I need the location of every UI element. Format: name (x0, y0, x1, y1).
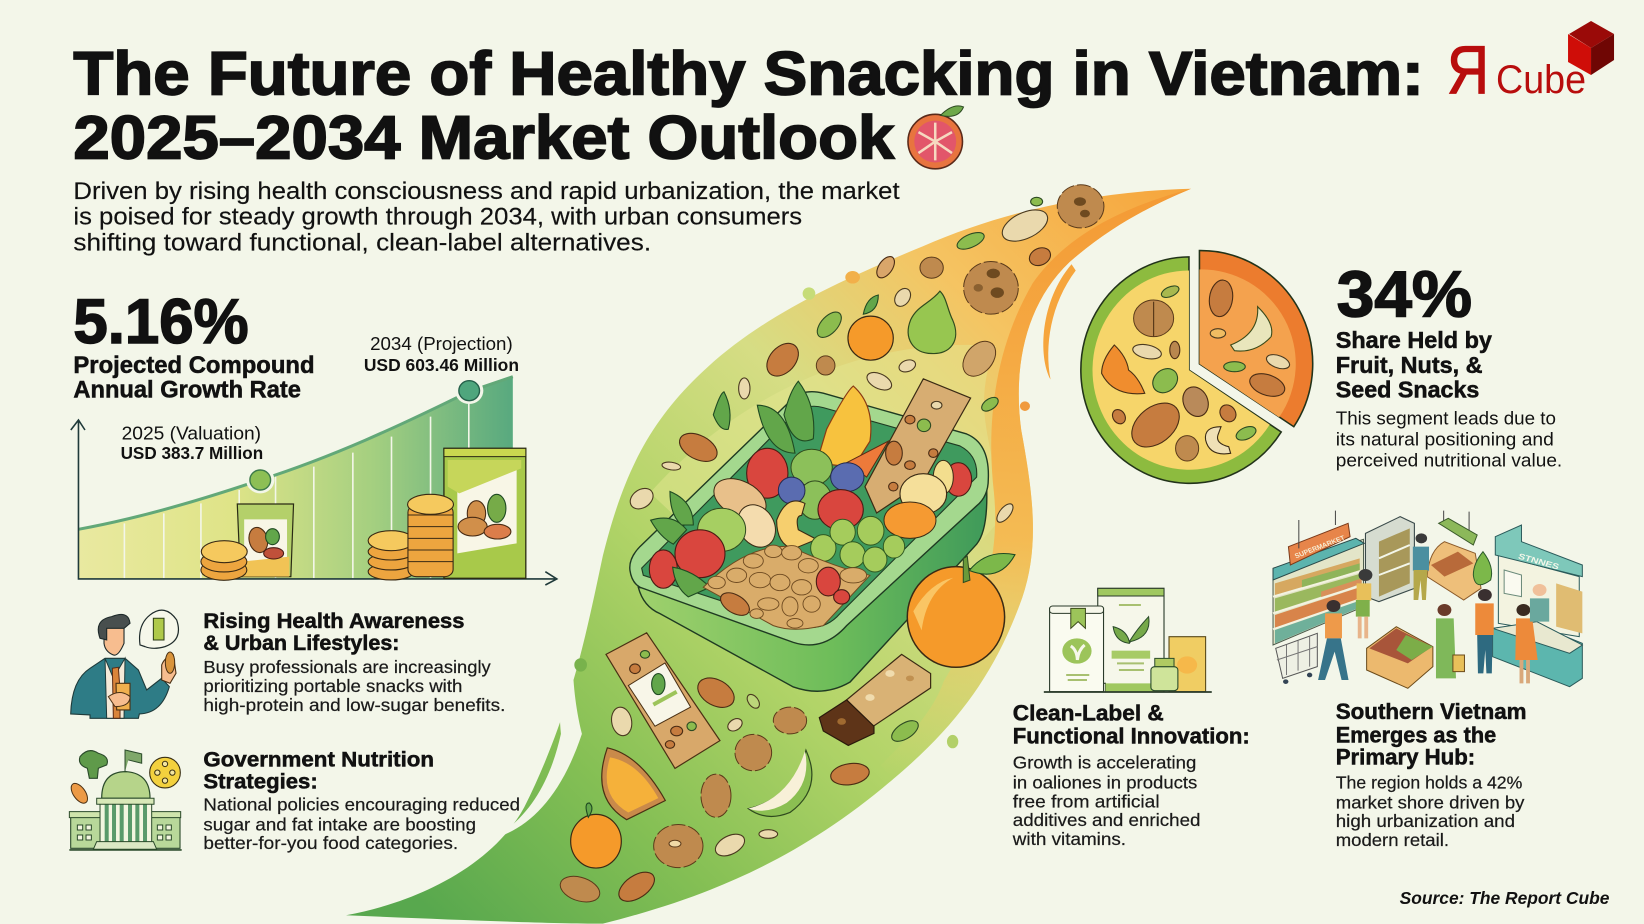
lunch bowl (630, 379, 988, 691)
icon: professional with snack (71, 610, 178, 718)
text: rising health awareness: Rising Health Awareness (203, 609, 465, 633)
subtitle: Driven by rising health consciousness and rapid urbanization, the market (73, 178, 900, 204)
subtitle: is poised for steady growth through 2034, with urban consumers (73, 203, 802, 229)
vitamin circle (150, 757, 180, 788)
subtitle: shifting toward functional, clean-label alternatives. (73, 230, 651, 256)
text: southern vietnam: Primary Hub: (1336, 744, 1475, 769)
text: clean-label (1012, 700, 1250, 849)
label: 2034 projection: USD 603.46 Million (364, 355, 519, 375)
growth curve (78, 377, 513, 529)
checkout stall (1493, 525, 1582, 687)
stat: CAGR: 5.16% (73, 287, 248, 357)
flying nuts and seeds (559, 197, 1051, 907)
text: southern vietnam: high urbanization and (1336, 811, 1515, 831)
text: southern vietnam: market shore driven by (1336, 792, 1525, 812)
shoppers (1276, 533, 1549, 684)
stat: 34% share: 34% (1337, 258, 1472, 331)
text: clean-label: free from artificial (1013, 791, 1160, 811)
pie chart: 34% share (1081, 251, 1313, 483)
stat: 34% share: Share Held by (1336, 327, 1492, 353)
central snack illustration (559, 185, 1104, 907)
title: The Future of Healthy Snacking in Vietnam: (73, 39, 1424, 107)
icon: government building (68, 750, 182, 850)
bowl contents (649, 379, 972, 629)
title (73, 39, 1424, 171)
logo: Report Cube: Я (1447, 33, 1489, 109)
wrapped snack bar (606, 633, 720, 768)
stat: 34% share: perceived nutritional value. (1336, 450, 1562, 471)
label: 2034 projection (364, 333, 519, 375)
text: government nutrition: National policies encouraging reduced (203, 794, 520, 814)
icon: grapefruit (908, 106, 964, 169)
apple slice (748, 750, 812, 816)
stat: 34% share: its natural positioning and (1336, 429, 1554, 450)
source note: Source: The Report Cube (1400, 888, 1609, 908)
text: southern vietnam (1336, 699, 1527, 850)
label: 2025 valuation (121, 422, 263, 463)
text: rising health awareness: prioritizing portable snacks with (203, 676, 462, 696)
text: rising health awareness (203, 609, 505, 715)
nut bar (68, 781, 91, 806)
text: clean-label: Growth is accelerating (1013, 753, 1196, 773)
text: clean-label: in oaliones in products (1013, 772, 1198, 792)
fruit crate (1367, 627, 1433, 688)
stat: 34% share: Fruit, Nuts, & (1336, 352, 1483, 378)
pear (908, 291, 956, 354)
large orange (907, 553, 1015, 667)
small snack pack (237, 504, 294, 577)
cookies and walnuts (654, 185, 1104, 868)
icon: supermarket scene (1273, 511, 1582, 688)
coin stacks (368, 494, 453, 580)
chart: market growth (71, 377, 557, 585)
stat: 34% share: This segment leads due to (1336, 408, 1556, 429)
tangerine (848, 295, 893, 360)
icon: supermarket scene: SUPERMARKET (1293, 533, 1347, 560)
text: government nutrition (203, 747, 520, 853)
text: clean-label: Functional Innovation: (1013, 723, 1250, 748)
text: government nutrition: better-for-you food categories. (203, 833, 458, 853)
point 2034 (455, 377, 483, 404)
checkout stall: STNNES (1517, 551, 1561, 572)
text: southern vietnam: The region holds a 42% (1336, 772, 1522, 792)
stat: 34% share: Seed Snacks (1336, 376, 1479, 402)
large snack pack (444, 448, 526, 578)
text: clean-label: with vitamins. (1012, 829, 1126, 849)
logo: Report Cube (1447, 21, 1614, 109)
text: rising health awareness: high-protein and low-sugar benefits. (203, 695, 505, 715)
stat: CAGR: Annual Growth Rate (73, 376, 301, 403)
orange slice (602, 748, 665, 820)
label: 2025 valuation: USD 383.7 Million (121, 443, 263, 463)
stat: CAGR (73, 287, 315, 403)
title: 2025–2034 Market Outlook (73, 103, 895, 171)
stat: CAGR: Projected Compound (73, 352, 315, 379)
stat: 34% share (1336, 258, 1562, 471)
broccoli (79, 751, 107, 778)
text: southern vietnam: Emerges as the (1336, 722, 1496, 747)
label: 2025 valuation: 2025 (Valuation) (122, 422, 261, 443)
text: rising health awareness: & Urban Lifestyles: (203, 631, 399, 655)
text: clean-label: additives and enriched (1013, 810, 1200, 830)
small orange (571, 803, 621, 868)
axes (71, 420, 557, 585)
icon: clean-label packaging (1044, 588, 1212, 692)
produce stand (1427, 542, 1492, 600)
text: southern vietnam: Southern Vietnam (1336, 699, 1527, 724)
text: government nutrition: Government Nutrition (203, 747, 434, 771)
text: rising health awareness: Busy professionals are increasingly (203, 657, 491, 677)
small coin stack (201, 541, 247, 580)
produce shelves (1273, 538, 1364, 645)
label: 2034 projection: 2034 (Projection) (370, 333, 513, 354)
text: government nutrition: Strategies: (203, 769, 318, 793)
text: southern vietnam: modern retail. (1336, 830, 1449, 850)
drinks fridge (1365, 517, 1414, 602)
speech bubble (140, 610, 178, 648)
point 2025 (246, 467, 274, 493)
subtitle (73, 178, 900, 256)
granola bar (819, 654, 931, 745)
swoosh of healthy snacks (346, 189, 1191, 924)
text: government nutrition: sugar and fat intake are boosting (203, 814, 476, 834)
logo: Report Cube: Cube (1496, 58, 1586, 102)
text: clean-label: Clean-Label & (1013, 700, 1164, 725)
